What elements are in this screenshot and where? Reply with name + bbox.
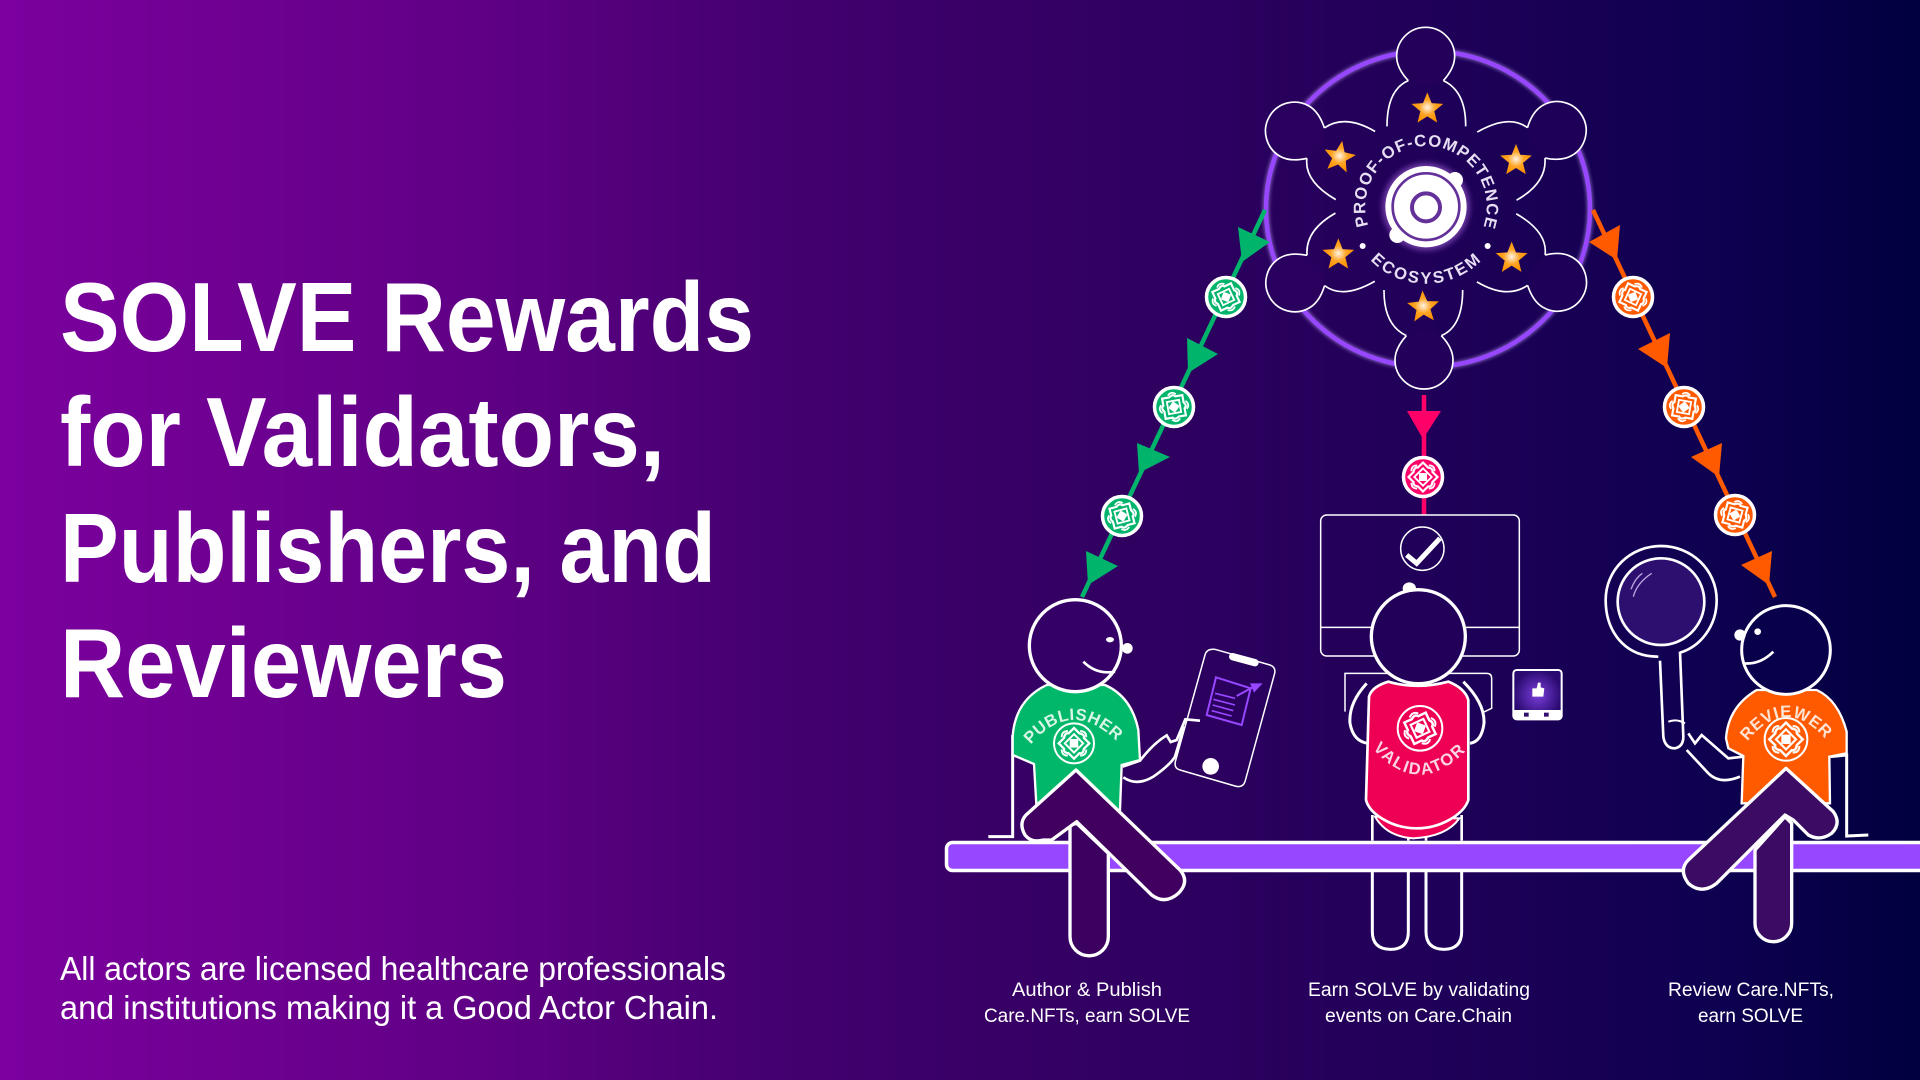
subtitle text: and institutions making it a Good Actor Chain. <box>60 989 718 1026</box>
head <box>1371 582 1465 684</box>
arms <box>1350 682 1484 743</box>
title: for Validators, <box>60 377 665 487</box>
icon: thumbs-up tablet <box>1513 670 1562 719</box>
caption: reviewer <box>1668 980 1834 1027</box>
laptop <box>1321 515 1519 712</box>
caption: publisher: Care.NFTs, earn SOLVE <box>984 1006 1190 1027</box>
phone document icon <box>1207 677 1263 725</box>
title: Reviewers <box>60 608 507 718</box>
hips <box>1372 815 1462 841</box>
validator badge <box>1398 706 1442 751</box>
caption: publisher <box>984 980 1190 1027</box>
publisher figure <box>988 598 1276 958</box>
caption: publisher: Author & Publish <box>1012 980 1162 1001</box>
reviewer shirt <box>1726 690 1847 803</box>
caption: validator: events on Care.Chain <box>1325 1006 1512 1027</box>
thigh <box>1022 770 1185 900</box>
validator lower legs <box>1372 870 1462 949</box>
central logo <box>1382 163 1470 251</box>
caption: reviewer: earn SOLVE <box>1698 1006 1803 1027</box>
reviewer figure <box>1604 544 1868 944</box>
six people around the circle <box>1250 27 1602 389</box>
back arm <box>988 735 1013 837</box>
subtitle text: All actors are licensed healthcare professionals <box>60 950 726 987</box>
title: Publishers, and <box>60 493 716 603</box>
head <box>1734 606 1830 694</box>
green SOLVE coins <box>1102 278 1246 536</box>
green arrow: ecosystem to publisher <box>1082 210 1270 597</box>
caption: reviewer: Review Care.NFTs, <box>1668 980 1834 1001</box>
publisher shirt <box>1013 685 1140 810</box>
back arm <box>1831 755 1868 836</box>
phone <box>1175 649 1275 787</box>
title: SOLVE Rewards <box>60 262 754 372</box>
magnifying glass <box>1606 546 1717 748</box>
publisher badge <box>1054 723 1094 763</box>
shirt label: PUBLISHER <box>1023 708 1122 744</box>
front arm <box>1687 733 1743 780</box>
pink SOLVE coin <box>1404 458 1442 496</box>
shirt label: REVIEWER <box>1740 706 1832 740</box>
validator shirt <box>1366 682 1468 828</box>
head <box>1029 600 1133 692</box>
validator figure <box>1320 514 1563 841</box>
pink arrow: ecosystem to validator <box>1407 395 1441 515</box>
front arm <box>1123 719 1200 782</box>
lower leg <box>1070 823 1108 956</box>
caption: validator: Earn SOLVE by validating <box>1308 980 1530 1001</box>
proof-of-competence ring <box>1266 51 1590 367</box>
caption: validator <box>1308 980 1530 1027</box>
curved label: proof-of-competence: PROOF-OF-COMPETENCE <box>1354 134 1498 229</box>
subtitle text <box>60 950 726 1026</box>
thigh <box>1683 768 1837 889</box>
table bar <box>946 842 1920 870</box>
ecosystem emblem <box>1264 26 1588 390</box>
curved label: proof-of-competence: ECOSYSTEM <box>1371 252 1480 284</box>
orange arrow: ecosystem to reviewer <box>1589 210 1775 597</box>
title <box>60 262 754 718</box>
orange SOLVE coins <box>1614 278 1755 535</box>
shirt label: VALIDATOR <box>1376 740 1466 775</box>
reviewer badge <box>1765 718 1807 761</box>
lower leg <box>1755 817 1792 942</box>
stars <box>1321 92 1532 322</box>
curved label: proof-of-competence <box>1354 134 1498 284</box>
